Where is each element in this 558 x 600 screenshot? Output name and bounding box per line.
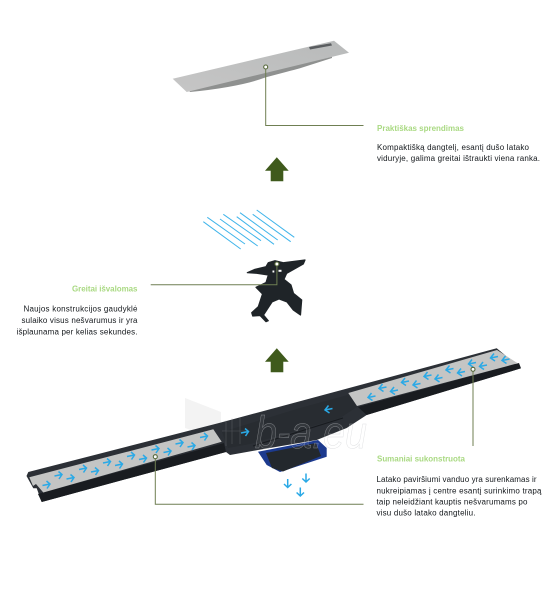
lower edge shading [38, 443, 226, 502]
watermark: b-a.eu: b-a.eu [255, 407, 367, 458]
callout line: channel right [471, 367, 475, 446]
text block: Greitai išvalomas: išplaunama per kelias sekundes. [16, 328, 138, 336]
text block: Greitai išvalomas: sulaiko visus nešvarumus ir yra [22, 316, 138, 325]
flow arrows: left panel [42, 428, 248, 488]
callout line: catcher [151, 262, 279, 285]
trap: body [266, 443, 321, 472]
product: hair catcher [247, 260, 305, 322]
text block: Praktiškas sprendimas: Praktiškas sprendimas [377, 124, 465, 133]
text block: Greitai išvalomas: Greitai išvalomas [72, 284, 138, 294]
watermark: b-a.eu [222, 407, 367, 458]
text block: Praktiškas sprendimas [377, 124, 540, 163]
text block: Sumaniai sukonstruota: taip neleidžiant kauptis nešvarumams po [376, 498, 528, 506]
watermark: faint shape [185, 398, 221, 440]
icon: water rain lines [203, 210, 294, 249]
product: shower channel drain [26, 348, 521, 502]
flow arrows: down [284, 474, 310, 496]
arrow: up, top [265, 157, 289, 181]
channel body [26, 348, 521, 502]
grey panel: right [348, 350, 518, 406]
text block: Sumaniai sukonstruota: Sumaniai sukonstruota [377, 454, 466, 464]
channel centre shading [222, 395, 360, 448]
text block: Greitai išvalomas [16, 284, 138, 336]
arrow: up, middle [265, 348, 289, 372]
grey panel: left [29, 429, 222, 492]
callout line: cover [264, 65, 364, 126]
text block: Praktiškas sprendimas: Kompaktišką dangtelį, esantį dušo latako [377, 143, 530, 152]
text block: Greitai išvalomas: Naujos konstrukcijos gaudyklė [24, 304, 138, 314]
text block: Sumaniai sukonstruota: visu dušo latako dangteliu. [376, 508, 476, 518]
flow arrows: right panel [325, 354, 510, 413]
text block: Sumaniai sukonstruota [376, 454, 542, 518]
text block: Praktiškas sprendimas: viduryje, galima greitai ištraukti viena ranka. [377, 154, 540, 163]
text block: Sumaniai sukonstruota: nukreipiamas į centre esantį surinkimo trapą [376, 486, 542, 496]
trap: blue [258, 440, 327, 472]
product: removable cover [173, 41, 349, 92]
text block: Sumaniai sukonstruota: Latako paviršiumi vanduo yra surenkamas ir [376, 475, 537, 484]
callout line: channel left [153, 455, 364, 504]
